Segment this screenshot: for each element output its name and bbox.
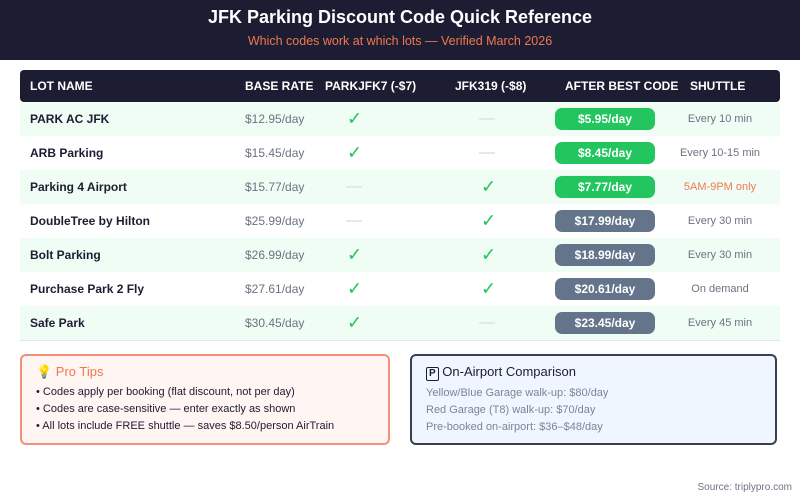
row: Purchase Park 2 Fly: $20.61/day — [575, 282, 635, 296]
panel: pro tips: 💡 Pro Tips — [36, 364, 103, 379]
row: ARB: $8.45/day — [578, 146, 632, 160]
title — [0, 0, 800, 60]
row: DoubleTree: ✓ — [481, 210, 496, 230]
row: DoubleTree — [30, 210, 752, 232]
row: ARB — [30, 142, 760, 164]
row: ARB: ✓ — [347, 142, 362, 162]
row: DoubleTree: DoubleTree by Hilton — [30, 214, 150, 228]
panel: pro tips: • All lots include FREE shuttle — saves $8.50/person AirTrain — [36, 420, 334, 432]
row: DoubleTree: Every 30 min — [688, 215, 752, 227]
row: PARK AC JFK: Every 10 min — [688, 113, 752, 125]
panel: on-airport comparison: Yellow/Blue Garage walk-up: $80/day — [426, 387, 608, 399]
panel: pro tips: • Codes apply per booking (flat discount, not per day) — [36, 386, 295, 398]
row: Safe Park — [20, 306, 780, 340]
row: Bolt: Every 30 min — [688, 249, 752, 261]
row: Bolt: $26.99/day — [245, 248, 304, 262]
row: PARK AC JFK: $5.95/day — [578, 112, 632, 126]
row: Bolt: ✓ — [481, 244, 496, 264]
row: DoubleTree: $25.99/day — [245, 214, 304, 228]
table — [20, 70, 780, 341]
row: Parking 4 Airport — [20, 170, 780, 204]
table header: JFK319 (-$8) — [455, 79, 526, 93]
row: PARK AC JFK — [20, 102, 780, 136]
table header: BASE RATE — [245, 79, 313, 93]
row: ARB: Every 10-15 min — [680, 147, 760, 159]
row: Parking 4 Airport: ✓ — [481, 176, 496, 196]
row: PARK AC JFK: ✓ — [347, 108, 362, 128]
panel: on-airport comparison: Pre-booked on-airport: $36–$48/day — [426, 421, 603, 433]
table header: PARKJFK7 (-$7) — [325, 79, 416, 93]
row: Safe Park: $30.45/day — [245, 316, 304, 330]
panel: on-airport comparison: Red Garage (T8) walk-up: $70/day — [426, 404, 595, 416]
row: Safe Park: ✓ — [347, 312, 362, 332]
table header — [20, 70, 780, 102]
row: Safe Park: Safe Park — [30, 316, 85, 330]
table header: LOT NAME — [30, 79, 93, 93]
row: Bolt: $18.99/day — [575, 248, 635, 262]
row: Bolt: Bolt Parking — [30, 248, 101, 262]
panel: pro tips — [20, 354, 390, 445]
row: Purchase Park 2 Fly: On demand — [691, 283, 749, 295]
row: Safe Park: $23.45/day — [575, 316, 635, 330]
panel: pro tips: • Codes are case-sensitive — enter exactly as shown — [36, 403, 295, 415]
row: PARK AC JFK: $12.95/day — [245, 112, 304, 126]
row: ARB: $15.45/day — [245, 146, 304, 160]
row: PARK AC JFK: PARK AC JFK — [30, 112, 109, 126]
row: Purchase Park 2 Fly: Purchase Park 2 Fly — [30, 282, 144, 296]
row: Purchase Park 2 Fly: $27.61/day — [245, 282, 304, 296]
panel: on-airport comparison: On-Airport Comparison — [442, 364, 576, 379]
title: Which codes work at which lots — Verified March 2026 — [248, 34, 552, 48]
panel: on-airport comparison — [410, 354, 777, 445]
row: Safe Park: Every 45 min — [688, 317, 752, 329]
table header: AFTER BEST CODE — [565, 79, 678, 93]
row: Parking 4 Airport: 5AM-9PM only — [684, 181, 756, 193]
source: Source: triplypro.com — [698, 482, 792, 493]
table header: SHUTTLE — [690, 79, 745, 93]
row: Parking 4 Airport: $15.77/day — [245, 180, 304, 194]
row: Purchase Park 2 Fly: ✓ — [481, 278, 496, 298]
row: DoubleTree: $17.99/day — [575, 214, 635, 228]
row: Parking 4 Airport: $7.77/day — [578, 180, 632, 194]
row: Purchase Park 2 Fly — [30, 278, 749, 300]
row: Bolt: ✓ — [347, 244, 362, 264]
row: Purchase Park 2 Fly: ✓ — [347, 278, 362, 298]
row: Parking 4 Airport: Parking 4 Airport — [30, 180, 127, 194]
row: Bolt — [20, 238, 780, 272]
row: ARB: ARB Parking — [30, 146, 103, 160]
panel: on-airport comparison: P — [429, 368, 436, 379]
title: JFK Parking Discount Code Quick Reference — [208, 7, 592, 27]
